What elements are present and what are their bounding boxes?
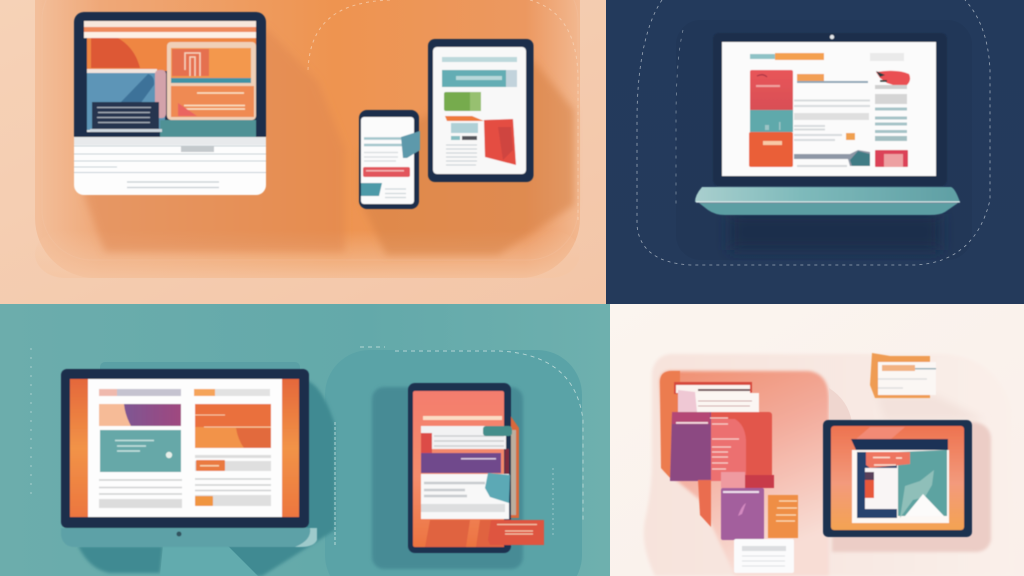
magenta heading bbox=[672, 412, 710, 424]
panel background bbox=[0, 0, 607, 304]
card pink corner bbox=[178, 103, 197, 116]
red card bbox=[750, 70, 793, 111]
tablet buttons bbox=[451, 136, 460, 140]
pink strip bbox=[155, 70, 166, 118]
sidebar grey bbox=[875, 94, 907, 104]
shelf underside bbox=[699, 203, 958, 215]
dark box lines bbox=[97, 108, 151, 122]
right title bar bbox=[194, 389, 270, 396]
red tab bbox=[421, 433, 432, 453]
tablet frame bbox=[823, 420, 972, 537]
grey block bbox=[195, 495, 271, 506]
footer line bbox=[797, 165, 847, 167]
tablet teal lines bbox=[451, 123, 478, 133]
tablet bbox=[408, 383, 544, 553]
tablet teal banner fill bbox=[442, 70, 506, 87]
right orange sidebar bbox=[281, 379, 299, 517]
button label bbox=[200, 465, 219, 466]
blue panel shade bbox=[119, 74, 154, 104]
coral caption bbox=[866, 452, 910, 468]
red block bbox=[865, 479, 874, 498]
outer backdrop outline bbox=[42, 0, 578, 260]
phone lines lower bbox=[385, 189, 406, 198]
pale mountain bbox=[900, 470, 934, 518]
monitor stand left bbox=[78, 546, 163, 573]
red thumb bbox=[875, 150, 908, 167]
orange card shade bbox=[236, 428, 271, 448]
card heading bbox=[882, 365, 915, 371]
teal footer bbox=[160, 120, 256, 137]
maroon clip bbox=[745, 475, 774, 488]
laptop frame bbox=[74, 12, 266, 137]
grey rows lower bbox=[195, 461, 271, 471]
monitor button bbox=[176, 532, 182, 536]
laptop base bbox=[74, 100, 266, 195]
laptop screen bbox=[74, 21, 266, 188]
panel background bbox=[610, 304, 1024, 576]
purple booklet bbox=[721, 488, 764, 540]
maroon edge bbox=[505, 449, 509, 474]
card orange panel bbox=[171, 86, 254, 117]
tablet dark button bbox=[462, 136, 477, 140]
sheet lines bbox=[434, 436, 504, 446]
tablet shadow bbox=[372, 387, 523, 569]
left title bar bbox=[99, 389, 181, 396]
picture tablet bbox=[823, 420, 972, 537]
monitor bbox=[61, 369, 317, 547]
orange card line bbox=[195, 415, 271, 427]
red book cover bbox=[674, 382, 752, 394]
laptop bbox=[695, 33, 960, 215]
lower lines bbox=[424, 483, 485, 496]
backdrop bottom fade bbox=[35, 230, 580, 278]
card lines bbox=[181, 93, 245, 109]
small orange button bbox=[195, 496, 213, 506]
laptop bbox=[74, 12, 266, 195]
header strip bbox=[84, 32, 256, 38]
back booklet bbox=[500, 408, 519, 518]
left grey block bbox=[99, 499, 182, 508]
tablet green light bbox=[470, 92, 481, 111]
orange backing bbox=[660, 371, 680, 480]
tablet orange bar bbox=[445, 116, 484, 121]
document stack bbox=[660, 371, 798, 573]
base lines bbox=[127, 182, 219, 188]
screen highlight bbox=[855, 427, 905, 440]
tablet frame bbox=[408, 383, 511, 553]
pink ribbon bbox=[721, 472, 745, 488]
chart icon bbox=[846, 133, 855, 140]
header band bbox=[84, 27, 256, 32]
white photo mat bbox=[852, 450, 949, 523]
red folder fold bbox=[498, 127, 513, 160]
phone screen bbox=[361, 117, 414, 204]
dark header bbox=[851, 439, 948, 450]
right text lines bbox=[195, 479, 271, 490]
card orange back bbox=[870, 353, 930, 398]
white pane bbox=[865, 468, 898, 509]
teal tab bbox=[401, 131, 420, 158]
rounded orange backdrop bbox=[35, 0, 580, 278]
card sheet bbox=[878, 362, 936, 395]
shelf highlight bbox=[696, 201, 960, 203]
slip grey bar bbox=[742, 546, 786, 551]
monitor right shadow bbox=[225, 380, 335, 576]
band line bbox=[461, 458, 496, 460]
dark ribbon bbox=[794, 150, 870, 166]
orange card label bbox=[763, 141, 782, 145]
heading rule bbox=[797, 81, 868, 83]
grey bar bbox=[794, 113, 869, 120]
folder lines bbox=[710, 418, 739, 469]
laptop shadow bbox=[84, 28, 345, 252]
left text lines bbox=[99, 480, 182, 494]
phone bbox=[359, 110, 420, 209]
right dotted accent bbox=[552, 468, 554, 535]
thumb pale bbox=[884, 154, 903, 167]
orange card bbox=[195, 404, 271, 448]
grey strip bbox=[421, 504, 505, 512]
tablet shadow bbox=[360, 60, 574, 255]
note lines bbox=[776, 501, 797, 521]
purple shape bbox=[124, 404, 181, 426]
right title orange bbox=[194, 389, 215, 396]
keyboard shade bbox=[74, 137, 266, 145]
monitor base bbox=[61, 528, 317, 547]
card window bbox=[185, 53, 200, 76]
screen header bbox=[84, 21, 256, 27]
phone frame bbox=[359, 110, 419, 209]
tablet title bar bbox=[442, 57, 517, 62]
lower sheet bbox=[421, 474, 509, 519]
sidebar teal block bbox=[875, 136, 907, 141]
soft page tint bbox=[644, 354, 1014, 576]
phone lines bbox=[364, 138, 402, 145]
tablet banner line bbox=[456, 76, 502, 80]
tablet frame bbox=[428, 39, 534, 182]
teal picture bbox=[898, 450, 947, 516]
teal card bbox=[100, 430, 181, 472]
panel: teal bottom-left bbox=[0, 304, 610, 576]
floating card shadow bbox=[876, 395, 985, 420]
left dash bbox=[30, 348, 32, 500]
tablet bottom stripes bbox=[425, 520, 504, 547]
rounded teal backdrop bbox=[325, 350, 582, 576]
laptop screen bbox=[722, 42, 936, 176]
inner shade bbox=[676, 20, 972, 260]
sidebar teal rows bbox=[875, 109, 907, 138]
slip lines bbox=[742, 556, 785, 566]
tablet screen bbox=[433, 47, 526, 174]
folder light panel bbox=[711, 419, 746, 481]
red bar line bbox=[366, 170, 404, 172]
nav search bbox=[870, 53, 904, 61]
dark spine bbox=[698, 389, 750, 391]
tablet teal banner bbox=[442, 70, 517, 87]
card lines bbox=[878, 379, 927, 388]
teal card glyph bbox=[765, 122, 780, 130]
monitor top shadow bbox=[100, 362, 300, 374]
article lines bbox=[794, 100, 870, 140]
laptop frame bbox=[713, 33, 947, 186]
left inner dashes bbox=[676, 30, 683, 205]
navy pane bbox=[857, 452, 897, 518]
keyboard lines bbox=[74, 146, 266, 172]
dashed outline bbox=[637, 0, 990, 265]
left orange sidebar bbox=[70, 379, 89, 517]
shelf top bbox=[695, 187, 960, 202]
tablet shadow bbox=[832, 422, 991, 552]
grey rows bbox=[195, 455, 271, 458]
nav teal bbox=[750, 54, 777, 59]
book page bbox=[676, 385, 750, 393]
red label lines bbox=[497, 524, 537, 534]
pale footer corner bbox=[90, 129, 162, 132]
title tint bbox=[99, 389, 117, 396]
teal tag bbox=[483, 426, 512, 436]
trackpad bbox=[181, 146, 214, 152]
red card mark bbox=[757, 75, 767, 77]
panel: navy top-right bbox=[606, 0, 1024, 304]
panel background bbox=[0, 304, 610, 576]
orange button bbox=[196, 460, 225, 471]
orange card top bbox=[195, 404, 271, 427]
sheet lines bbox=[698, 401, 752, 406]
article heading bbox=[797, 74, 824, 83]
panel: cream bottom-right bbox=[610, 304, 1024, 576]
purple band bbox=[421, 453, 501, 473]
image grey bbox=[875, 85, 907, 89]
orange card bbox=[749, 132, 793, 167]
tablet bbox=[428, 39, 534, 182]
orange note bbox=[768, 495, 798, 538]
red folder bbox=[484, 119, 516, 165]
pale divider bbox=[87, 69, 157, 73]
red image bbox=[876, 71, 910, 86]
red card text bbox=[756, 85, 780, 87]
doc sheet bbox=[421, 426, 506, 449]
phone red bar bbox=[363, 167, 410, 177]
phone text lines bbox=[364, 152, 398, 161]
tablet title bbox=[423, 416, 502, 420]
nav orange bbox=[775, 53, 824, 60]
dashed outline bbox=[360, 347, 583, 520]
teal card bbox=[750, 110, 793, 132]
base highlight bbox=[295, 528, 317, 547]
pink fold bbox=[678, 390, 697, 412]
floating card bbox=[870, 353, 936, 398]
image dark mark bbox=[876, 71, 887, 82]
screen pale edge bbox=[87, 70, 91, 132]
tablet green block bbox=[444, 92, 481, 111]
caption lines bbox=[873, 458, 902, 465]
tablet screen bbox=[413, 391, 504, 547]
white sheet bbox=[678, 393, 759, 413]
tablet text lines bbox=[446, 145, 477, 165]
white slip bbox=[734, 539, 794, 573]
panel background bbox=[606, 0, 1024, 304]
teal ribbon bbox=[485, 473, 510, 503]
booklet title bbox=[723, 491, 759, 493]
card rule bbox=[915, 368, 936, 370]
teal card lines bbox=[115, 440, 154, 451]
ribbon teal bbox=[850, 151, 870, 166]
phone teal badge bbox=[361, 183, 382, 196]
dashed device outline bbox=[308, 0, 578, 220]
red folder bbox=[672, 412, 772, 481]
teal card dot bbox=[166, 452, 172, 458]
heading line bbox=[676, 422, 708, 424]
panel: orange top-left bbox=[0, 0, 607, 304]
card image bbox=[171, 48, 251, 78]
shelf bbox=[695, 187, 960, 215]
hero red shape bbox=[91, 38, 140, 68]
salmon backdrop bbox=[660, 371, 829, 576]
booklet inner bbox=[511, 430, 516, 515]
red label bbox=[488, 520, 544, 545]
purple panel bbox=[670, 412, 711, 481]
salmon side shadow bbox=[829, 388, 852, 422]
webcam bbox=[830, 35, 834, 39]
shelf shadow bbox=[730, 214, 940, 250]
hero banner bbox=[87, 38, 256, 71]
dark notch bbox=[865, 472, 874, 480]
tablet screen bbox=[831, 426, 964, 530]
white peak bbox=[905, 494, 944, 516]
red ribbon bbox=[698, 480, 711, 527]
card teal strip bbox=[171, 78, 251, 83]
dark text box bbox=[92, 102, 159, 129]
peach card bbox=[99, 404, 181, 426]
monitor frame bbox=[61, 369, 309, 528]
monitor stand middle bbox=[160, 546, 258, 576]
right card bbox=[167, 42, 256, 120]
blue panel bbox=[87, 73, 165, 130]
page bbox=[88, 379, 282, 517]
card red image bbox=[172, 49, 209, 76]
booklet mark bbox=[738, 503, 746, 516]
dashed accent beside monitor bbox=[334, 422, 336, 545]
